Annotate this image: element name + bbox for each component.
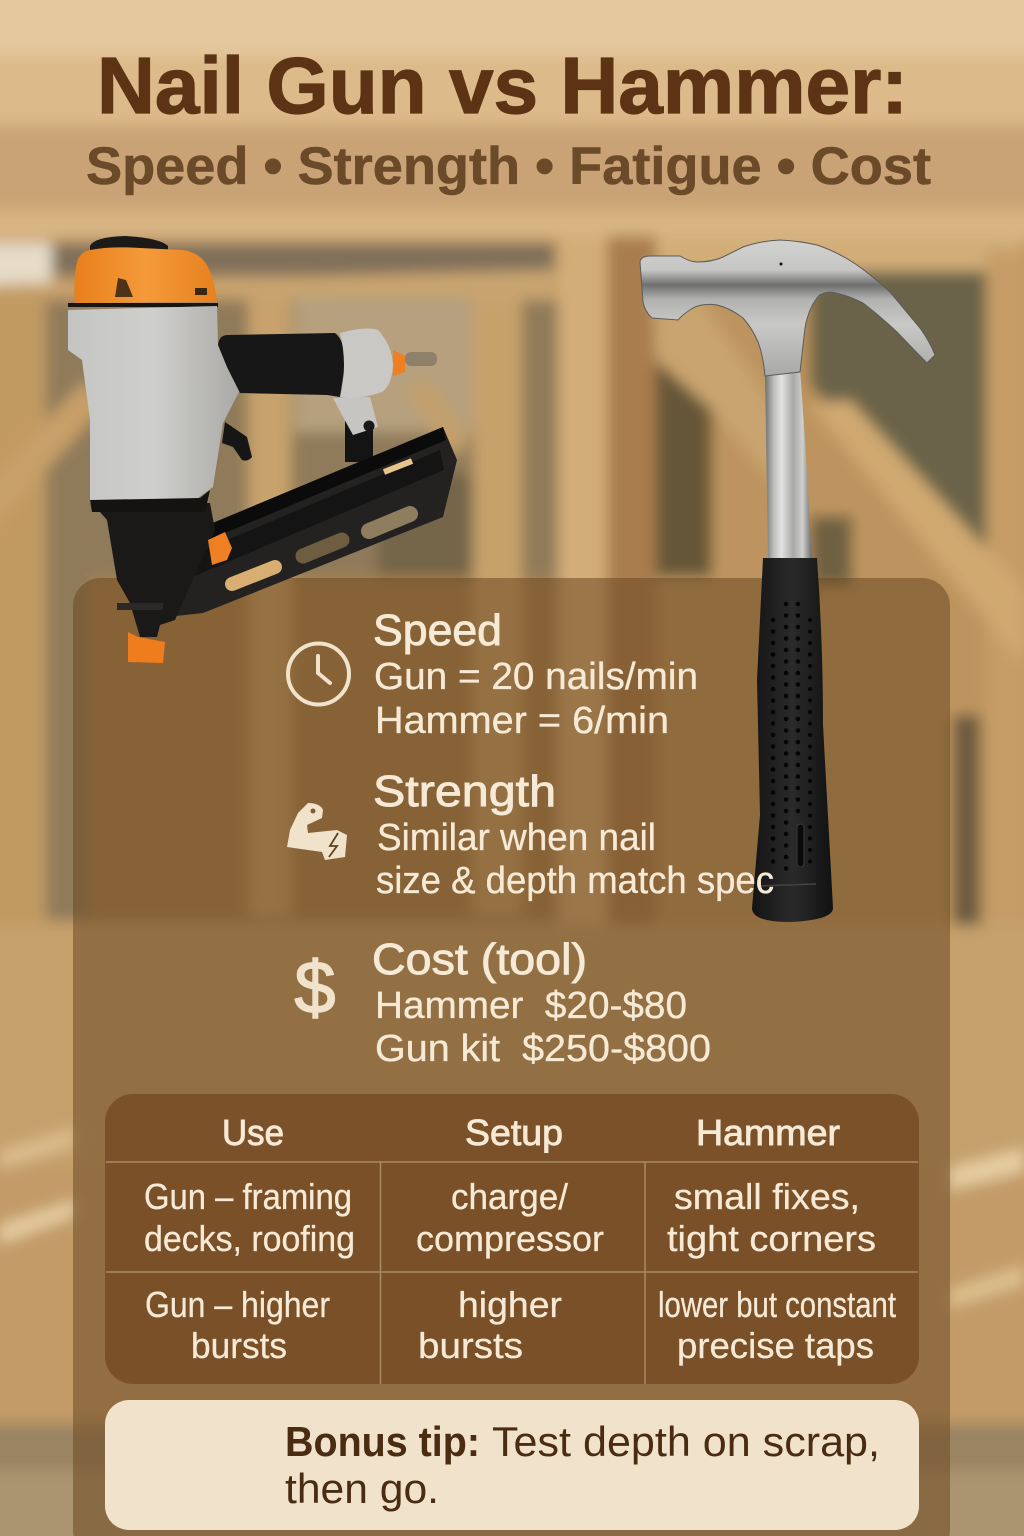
- callout: bonus tip: Test depth on scrap,: [492, 1418, 880, 1465]
- section: cost: [294, 935, 711, 1070]
- comparison table: [105, 1094, 919, 1384]
- table row: fatigue: [145, 1284, 896, 1366]
- table header row: [222, 1112, 840, 1153]
- text: speed figures: [374, 656, 698, 742]
- table row: use cases: compressor: [416, 1218, 604, 1259]
- callout: bonus tip: Bonus tip:: [285, 1418, 480, 1465]
- text: speed figures: Hammer = 6/min: [375, 700, 669, 742]
- table row: use cases: tight corners: [667, 1218, 876, 1259]
- table row: fatigue: bursts: [418, 1325, 523, 1366]
- table row: fatigue: bursts: [191, 1325, 287, 1366]
- callout: bonus tip: [105, 1400, 919, 1530]
- text: strength note: size & depth match spec: [376, 860, 774, 902]
- table row: use cases: small fixes,: [674, 1176, 860, 1217]
- table row: use cases: charge/: [451, 1176, 568, 1217]
- icon: clock: [288, 644, 349, 704]
- table row: fatigue: lower but constant: [658, 1284, 896, 1325]
- text: cost figures: Hammer $20-$80: [375, 985, 687, 1027]
- table row: use cases: Gun – framing: [144, 1176, 352, 1217]
- table header row: Use: [222, 1112, 284, 1153]
- table header row: Setup: [465, 1112, 563, 1153]
- text: cost figures: [375, 985, 711, 1070]
- table row: fatigue: precise taps: [677, 1325, 874, 1366]
- heading: cost: Cost (tool): [372, 935, 587, 984]
- section: speed: [288, 606, 698, 742]
- title: Nail Gun vs Hammer:: [97, 41, 908, 130]
- illustration: hammer: [640, 240, 935, 922]
- table row: fatigue: Gun – higher: [145, 1284, 330, 1325]
- table row: fatigue: higher: [458, 1284, 562, 1325]
- heading: strength: Strength: [373, 767, 556, 816]
- text: cost figures: Gun kit $250-$800: [375, 1028, 711, 1070]
- icon: flexed arm: [287, 803, 347, 860]
- section: strength: [287, 767, 774, 902]
- icon: dollar sign: $: [294, 946, 336, 1029]
- table row: use cases: decks, roofing: [144, 1218, 355, 1259]
- table row: use cases: [144, 1176, 876, 1259]
- panel: content backdrop: [73, 578, 950, 1536]
- heading: speed: Speed: [373, 606, 502, 655]
- text: strength note: Similar when nail: [377, 817, 656, 859]
- subtitle: Speed • Strength • Fatigue • Cost: [86, 137, 931, 196]
- text: speed figures: Gun = 20 nails/min: [374, 656, 698, 698]
- callout: bonus tip: then go.: [285, 1465, 439, 1512]
- illustration: nail gun: [68, 236, 457, 663]
- table header row: Hammer: [696, 1112, 840, 1153]
- text: strength note: [376, 817, 774, 902]
